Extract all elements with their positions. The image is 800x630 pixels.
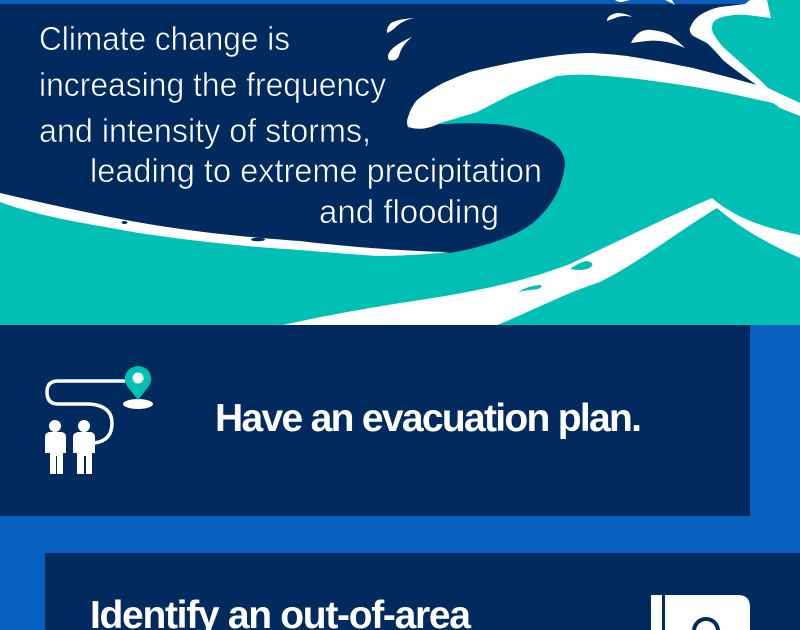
heading: have an evacuation plan: Have an evacuation plan. [215,397,642,440]
text block: climate change statement: leading to extreme precipitation [90,152,542,189]
panel: evacuation plan [0,325,750,516]
panel: wave illustration [0,0,800,325]
text block: climate change statement: Climate change is [39,20,290,57]
white lower edge of the curl [0,193,450,256]
water droplets [387,0,685,60]
top blue bar [0,0,750,4]
text block: climate change statement [39,20,542,230]
white wave crest [407,53,800,129]
icon: route from people to map pin [45,366,153,474]
water specks [122,221,265,241]
white spray streak [690,0,771,90]
icon: address book [651,593,750,630]
lower white swoosh [283,198,800,325]
text block: climate change statement: increasing the frequency [39,66,386,103]
panel: out-of-area contact [45,553,800,630]
text block: climate change statement: and flooding [319,193,499,230]
text block: climate change statement: and intensity of storms, [39,112,371,149]
navy sky and wave curl [0,4,760,253]
